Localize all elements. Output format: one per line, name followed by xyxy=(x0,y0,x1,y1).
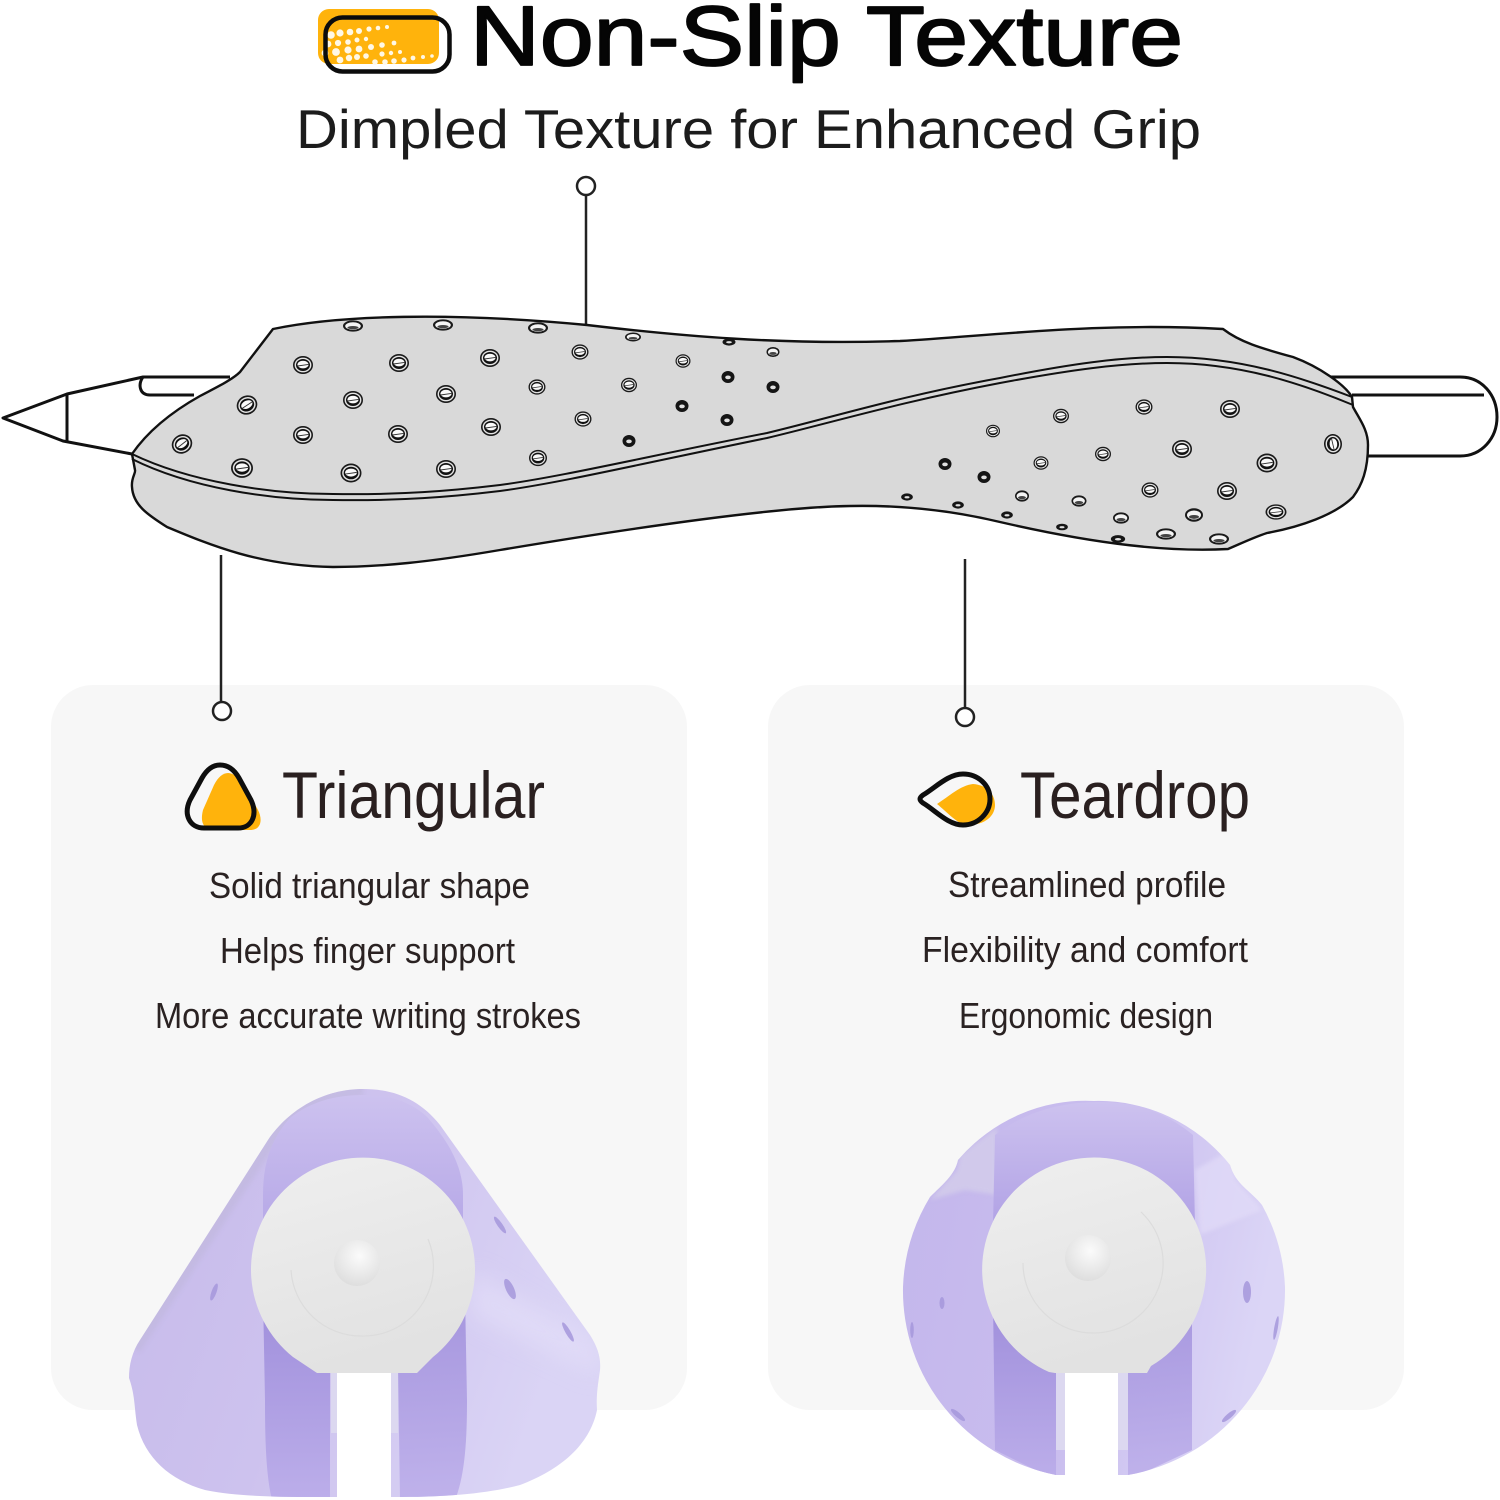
heading: triangular: Triangular xyxy=(282,758,545,832)
text: triangular benefits xyxy=(155,865,581,1036)
icon: non-slip texture xyxy=(318,9,450,72)
pen grip: dimples xyxy=(168,319,1343,545)
icon: teardrop xyxy=(920,774,995,825)
text: teardrop benefits: Streamlined profile xyxy=(948,864,1226,905)
text: teardrop benefits: Flexibility and comfort xyxy=(922,929,1248,970)
pen grip: seam xyxy=(132,357,1353,500)
panel: teardrop xyxy=(768,685,1404,1410)
white disc xyxy=(251,1158,475,1373)
grip cross-section: triangular xyxy=(120,1080,610,1500)
heading: teardrop: Teardrop xyxy=(1020,758,1250,832)
text: teardrop benefits: Ergonomic design xyxy=(959,995,1213,1036)
icon: triangle xyxy=(187,765,261,830)
white disc xyxy=(982,1158,1206,1373)
pen grip: body xyxy=(132,317,1368,567)
dimples xyxy=(910,1281,1280,1424)
text: triangular benefits: Solid triangular shape xyxy=(209,865,530,906)
text: teardrop benefits xyxy=(922,864,1248,1036)
text: triangular benefits: Helps finger support xyxy=(220,930,515,971)
callout: top line to texture xyxy=(577,177,595,326)
dimples xyxy=(209,1215,576,1343)
callout: left line to triangular xyxy=(213,555,231,720)
grip cross-section: teardrop xyxy=(895,1095,1290,1480)
callout: right line to teardrop xyxy=(956,559,974,726)
subtitle: Dimpled Texture for Enhanced Grip xyxy=(296,98,1201,160)
text: triangular benefits: More accurate writing strokes xyxy=(155,995,581,1036)
pen: nib and barrel xyxy=(3,377,1497,456)
panel: triangular xyxy=(51,685,687,1410)
